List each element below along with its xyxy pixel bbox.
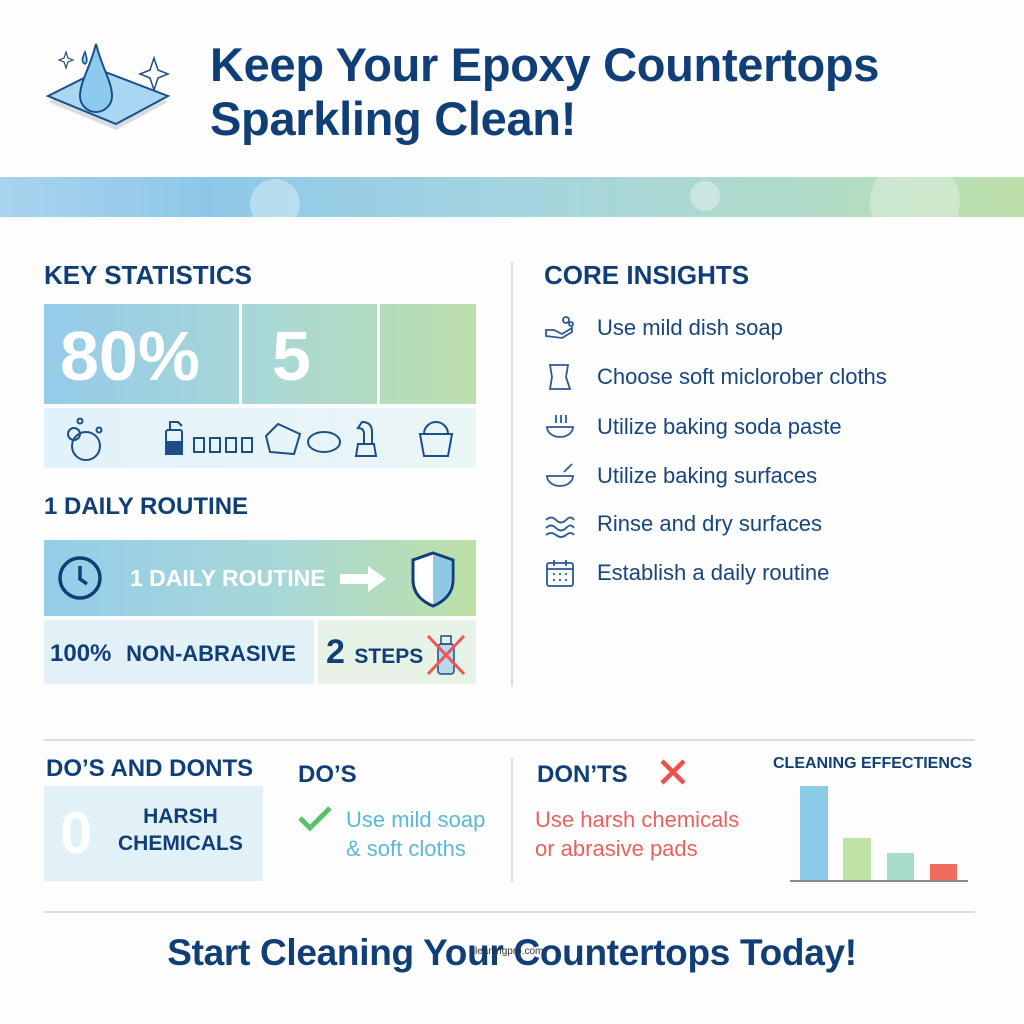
stat: 5: 5 (272, 317, 311, 395)
title: Keep Your Epoxy Countertops (210, 38, 879, 91)
title: Sparkling Clean! (210, 92, 576, 145)
insight 2: Choose soft miclorober cloths (597, 364, 887, 389)
stat: 100% non-abrasive (44, 620, 314, 684)
heading: do's: DO’S (298, 761, 357, 788)
do's text (346, 807, 485, 861)
stat: 80%: 80% (60, 317, 200, 395)
chart: cleaning effeciencies: CLEANING EFFECTIENCS (773, 755, 972, 772)
stat boxes (44, 304, 476, 404)
insight 3: Utilize baking soda paste (597, 414, 842, 439)
chart: cleaning effeciencies (773, 755, 972, 882)
insight 1: Use mild dish soap (597, 315, 783, 340)
arrow (340, 566, 386, 592)
divider (511, 262, 513, 686)
don'ts text: Use harsh chemicals (535, 807, 739, 832)
box: 0 harsh chemicals: CHEMICALS (118, 832, 243, 855)
heading: key statistics: KEY STATISTICS (44, 260, 252, 290)
banner (0, 177, 1024, 217)
box: 0 harsh chemicals (44, 786, 263, 881)
stat: 100% non-abrasive: 100% NON-ABRASIVE (50, 640, 296, 667)
heading: 1 daily routine: 1 DAILY ROUTINE (44, 493, 248, 520)
insight 6: Establish a daily routine (597, 560, 829, 585)
footer call to action: Start Cleaning Your Countertops Today! (167, 932, 857, 973)
heading: do's and donts: DO’S AND DONTS (46, 755, 253, 782)
insight 5: Rinse and dry surfaces (597, 511, 822, 536)
don'ts text (535, 807, 739, 861)
title (210, 38, 879, 145)
icon: red x (660, 759, 686, 785)
icon: clock (58, 556, 102, 600)
insight 4: Utilize baking surfaces (597, 463, 817, 488)
stat: 2 steps: 2 STEPS (326, 633, 423, 671)
do's text: & soft cloths (346, 836, 466, 861)
insights list (545, 315, 887, 587)
icon row: cleaning tools (44, 408, 476, 468)
routine band: 1 DAILY ROUTINE (130, 565, 326, 591)
heading: don'ts: DON’TS (537, 761, 628, 788)
icon: check (298, 806, 332, 832)
watermark: cleaningpro.com (470, 946, 543, 957)
icon: shield (412, 551, 454, 608)
stat: 2 steps (318, 620, 476, 684)
box: 0 harsh chemicals: HARSH (143, 805, 218, 828)
don'ts text: or abrasive pads (535, 836, 698, 861)
do's text: Use mild soap (346, 807, 485, 832)
box: 0 harsh chemicals: 0 (60, 801, 92, 866)
heading: core insights: CORE INSIGHTS (544, 260, 749, 290)
routine band (44, 540, 476, 616)
icon: water drop on countertop (46, 44, 170, 130)
